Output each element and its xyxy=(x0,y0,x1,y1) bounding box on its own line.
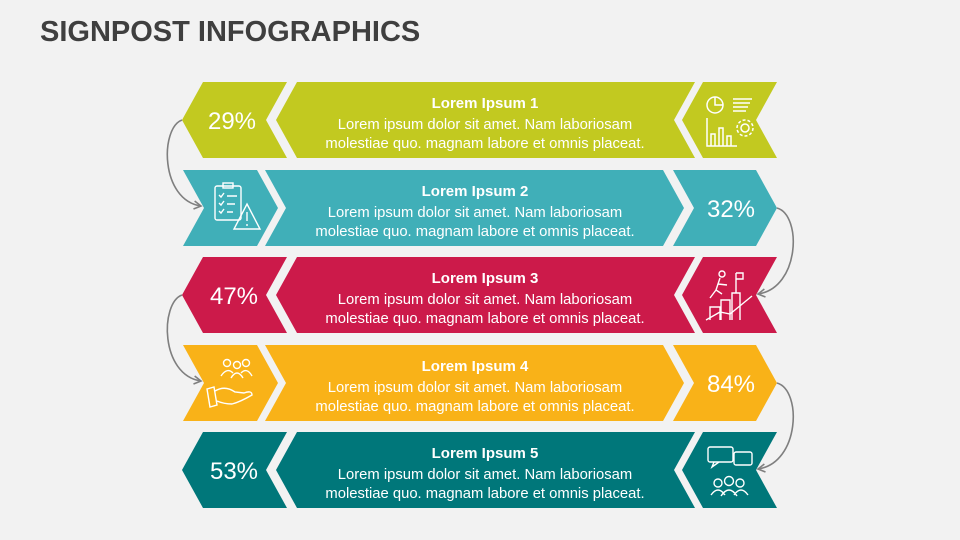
row 3: molestiae quo. magnam labore et omnis placeat. xyxy=(325,311,645,327)
row 3: Lorem ipsum dolor sit amet. Nam laboriosam xyxy=(338,292,632,308)
icon: chat people xyxy=(708,447,752,496)
icon: hand with people xyxy=(207,360,252,407)
icon: chart and gear xyxy=(707,97,753,146)
row 2: Lorem ipsum dolor sit amet. Nam laboriosam xyxy=(328,205,622,221)
row 1: Lorem ipsum dolor sit amet. Nam laboriosam xyxy=(338,117,632,133)
arrows: connectors xyxy=(167,120,793,469)
row 2: 32% xyxy=(707,196,755,223)
row 5: Lorem Ipsum 5 xyxy=(432,445,538,462)
row 3: 47% xyxy=(210,283,258,310)
row 1 xyxy=(182,82,777,158)
row 4: 84% xyxy=(707,371,755,398)
row 1: molestiae quo. magnam labore et omnis placeat. xyxy=(325,136,645,152)
row 1: 29% xyxy=(208,108,256,135)
row 5: 53% xyxy=(210,458,258,485)
row 2: Lorem Ipsum 2 xyxy=(422,183,528,200)
icon: clipboard warning xyxy=(215,183,260,229)
row 5: molestiae quo. magnam labore et omnis placeat. xyxy=(325,486,645,502)
row 4: Lorem ipsum dolor sit amet. Nam laboriosam xyxy=(328,380,622,396)
row 5: Lorem ipsum dolor sit amet. Nam laboriosam xyxy=(338,467,632,483)
row 4: molestiae quo. magnam labore et omnis placeat. xyxy=(315,399,635,415)
row 5 xyxy=(182,432,777,508)
title: SIGNPOST INFOGRAPHICS xyxy=(40,16,420,48)
row 2 xyxy=(183,170,777,246)
row 2: molestiae quo. magnam labore et omnis placeat. xyxy=(315,224,635,240)
icon: climbing person xyxy=(706,271,752,320)
row 1: Lorem Ipsum 1 xyxy=(432,95,538,112)
row 3: Lorem Ipsum 3 xyxy=(432,270,538,287)
row 4 xyxy=(183,345,777,421)
row 4: Lorem Ipsum 4 xyxy=(422,358,529,375)
row 3 xyxy=(182,257,777,333)
